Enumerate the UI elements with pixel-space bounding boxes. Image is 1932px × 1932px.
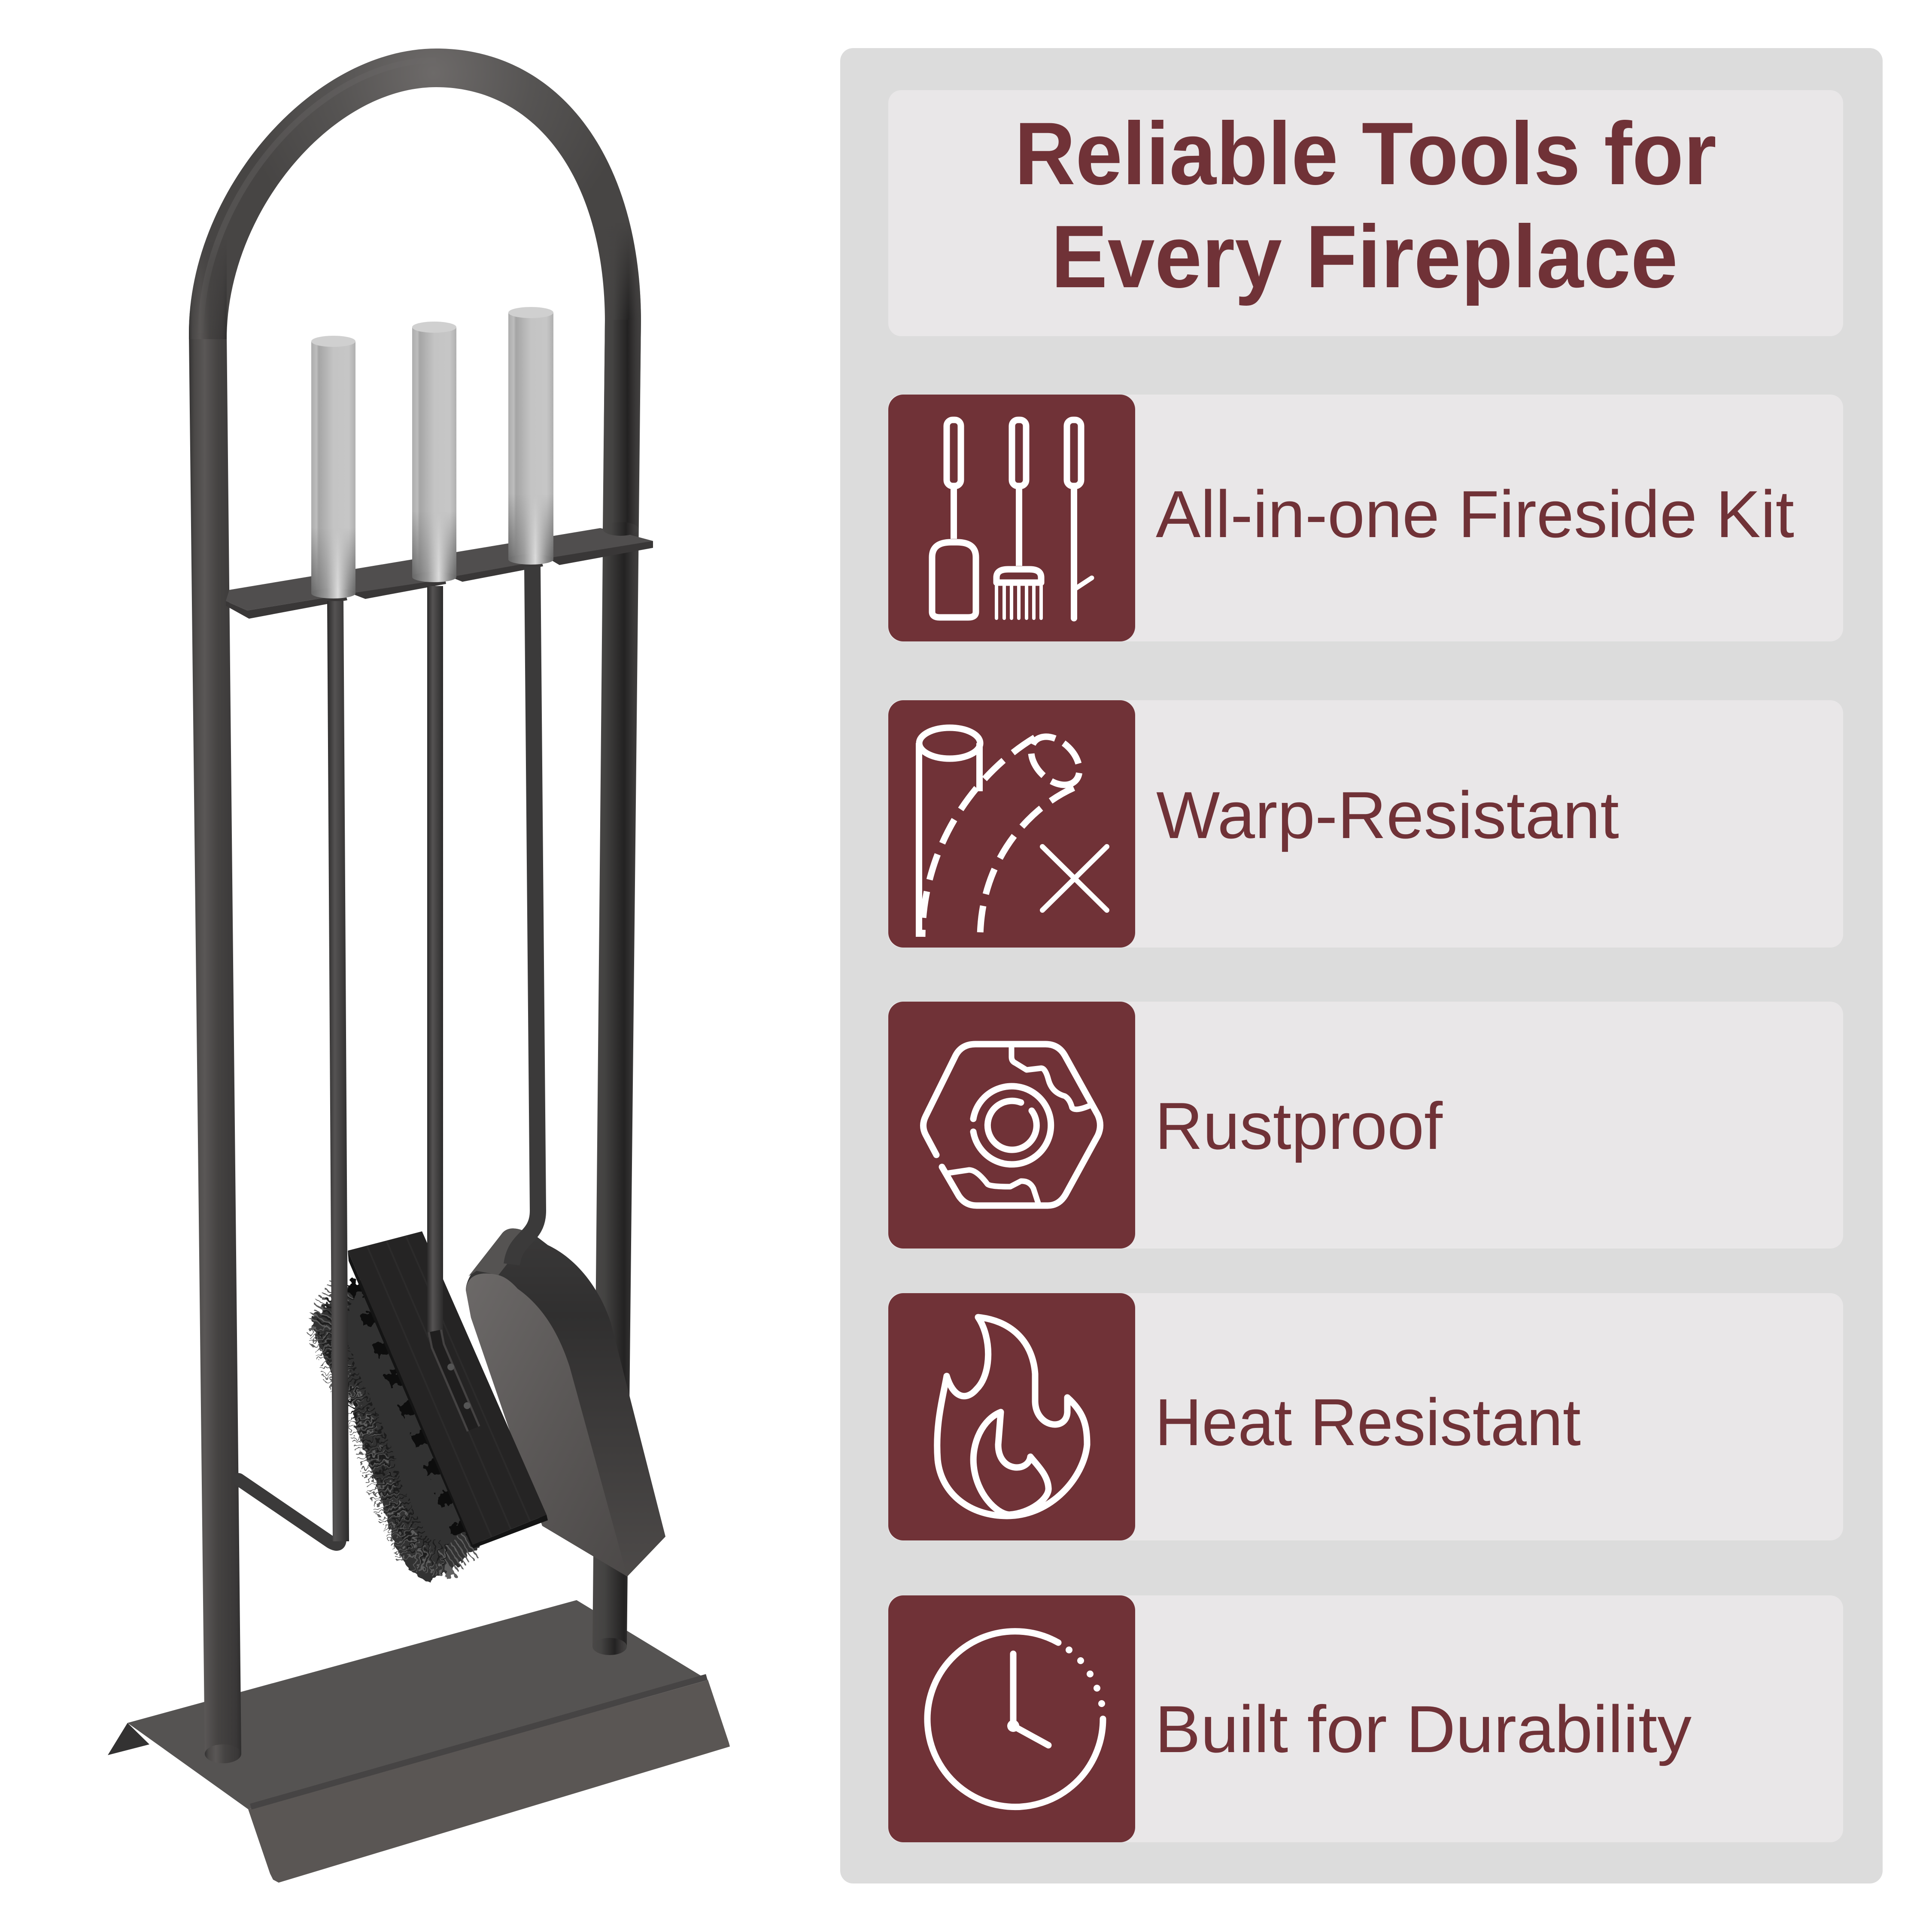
label: Rustproof xyxy=(1155,1089,1443,1163)
row: rustproof xyxy=(888,1002,1843,1249)
rod: fire poker hook xyxy=(239,1479,340,1544)
row: all-in-one kit xyxy=(888,395,1843,641)
label: All-in-one Fireside Kit xyxy=(1156,477,1794,551)
icon: flame xyxy=(937,1317,1087,1516)
row: built for durability xyxy=(888,1595,1843,1842)
row: heat resistant xyxy=(888,1293,1843,1540)
frame: arch xyxy=(189,49,641,340)
title card xyxy=(888,90,1843,336)
title: Reliable Tools for xyxy=(1015,104,1716,203)
panel: features xyxy=(840,48,1883,1883)
icon: clock xyxy=(927,1631,1105,1807)
rod: brush handle and bracket xyxy=(427,586,474,1429)
product: fireplace tool set xyxy=(108,49,730,1883)
frame: left upright xyxy=(189,335,241,1763)
label: Built for Durability xyxy=(1155,1692,1692,1766)
label: Warp-Resistant xyxy=(1156,778,1619,852)
label: Heat Resistant xyxy=(1155,1385,1581,1459)
frame: right upright xyxy=(592,320,641,1655)
tool holder shelf xyxy=(226,528,653,619)
dustpan xyxy=(466,1228,665,1577)
rod: dustpan handle xyxy=(512,567,538,1264)
stand base xyxy=(108,1600,730,1883)
handle: right steel grip xyxy=(508,307,553,565)
frame: right upright above shelf xyxy=(603,320,641,536)
row: warp-resistant xyxy=(888,700,1843,948)
rod: fire poker shaft xyxy=(327,601,349,1541)
brush bristles xyxy=(311,1275,483,1582)
brush block xyxy=(348,1231,548,1548)
icon: three tools xyxy=(932,420,1092,618)
icon: warped log xyxy=(919,727,1107,937)
icon: rusted nut xyxy=(923,1044,1100,1206)
title xyxy=(1015,104,1716,306)
title: Every Fireplace xyxy=(1051,207,1678,306)
handle: middle steel grip xyxy=(412,322,456,582)
handle: left steel grip xyxy=(311,336,355,598)
